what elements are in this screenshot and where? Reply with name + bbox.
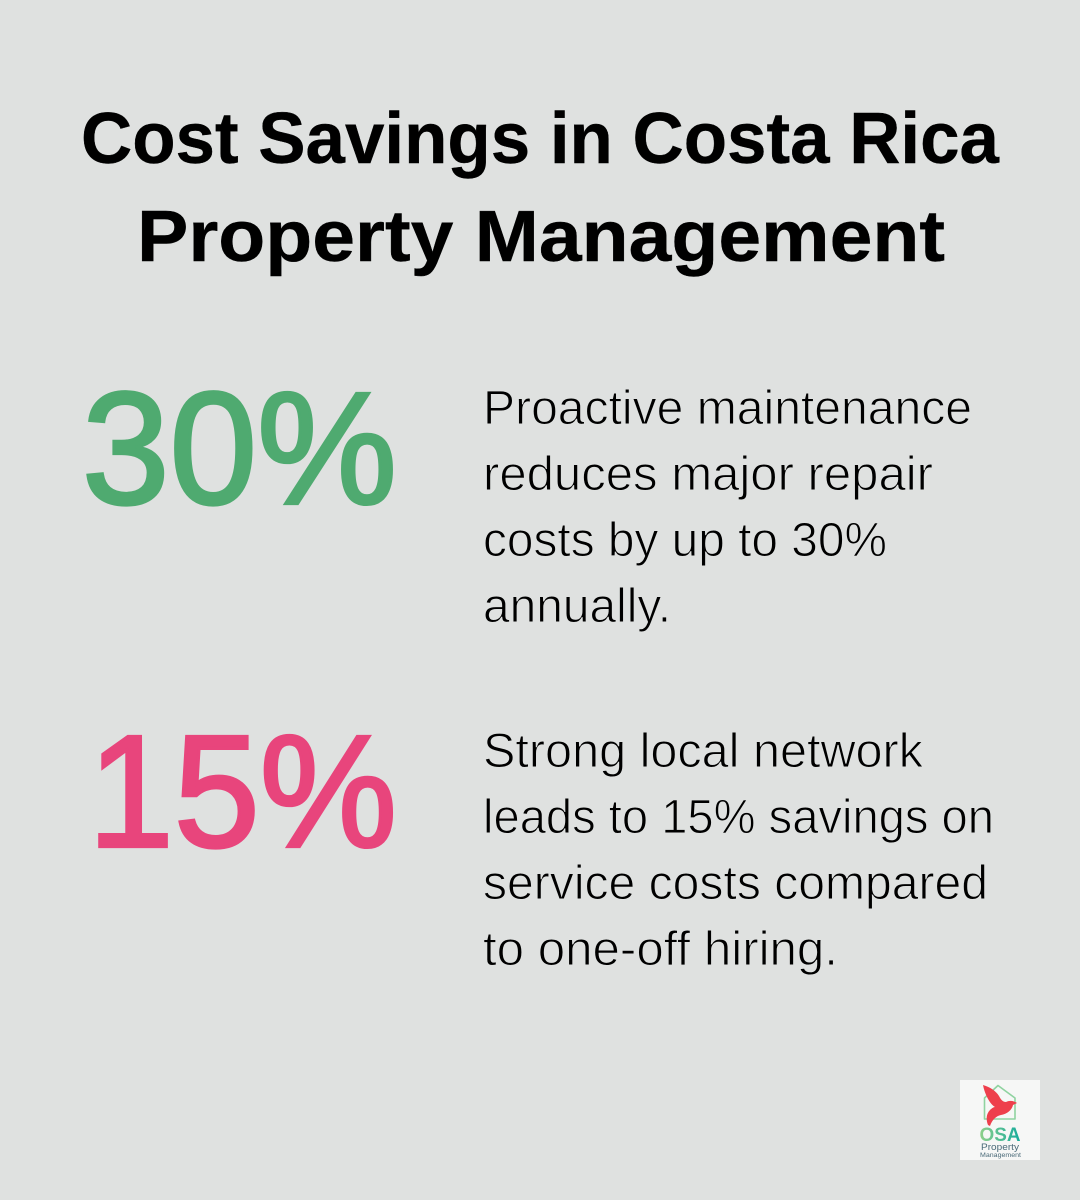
icon: house outline	[984, 1086, 1015, 1119]
logo subtitle second line: Management	[980, 1152, 1021, 1159]
logo: OSA Property Management	[960, 1080, 1040, 1160]
stat: 30%: 30%	[82, 358, 397, 538]
logo subtitle: Property	[981, 1142, 1019, 1153]
text block: local network	[483, 725, 994, 976]
logo wordmark: OSA	[980, 1125, 1021, 1146]
text block: proactive maintenance: reduces major repair	[483, 448, 933, 501]
title: Cost Savings in Costa Rica	[81, 99, 1000, 179]
text block: proactive maintenance: annually.	[483, 580, 671, 633]
text block: proactive maintenance: Proactive maintenance	[483, 382, 972, 435]
icon: red bird	[983, 1085, 1017, 1126]
stat: 15%: 15%	[88, 702, 397, 880]
title: Property Management	[137, 197, 945, 277]
text block: proactive maintenance	[483, 382, 972, 633]
text block: proactive maintenance: costs by up to 30%	[483, 514, 887, 567]
text block: local network: leads to 15% savings on	[483, 791, 994, 844]
title	[81, 99, 1000, 277]
text block: local network: to one-off hiring.	[483, 923, 838, 976]
text block: local network: Strong local network	[483, 725, 924, 778]
text block: local network: service costs compared	[483, 857, 988, 910]
